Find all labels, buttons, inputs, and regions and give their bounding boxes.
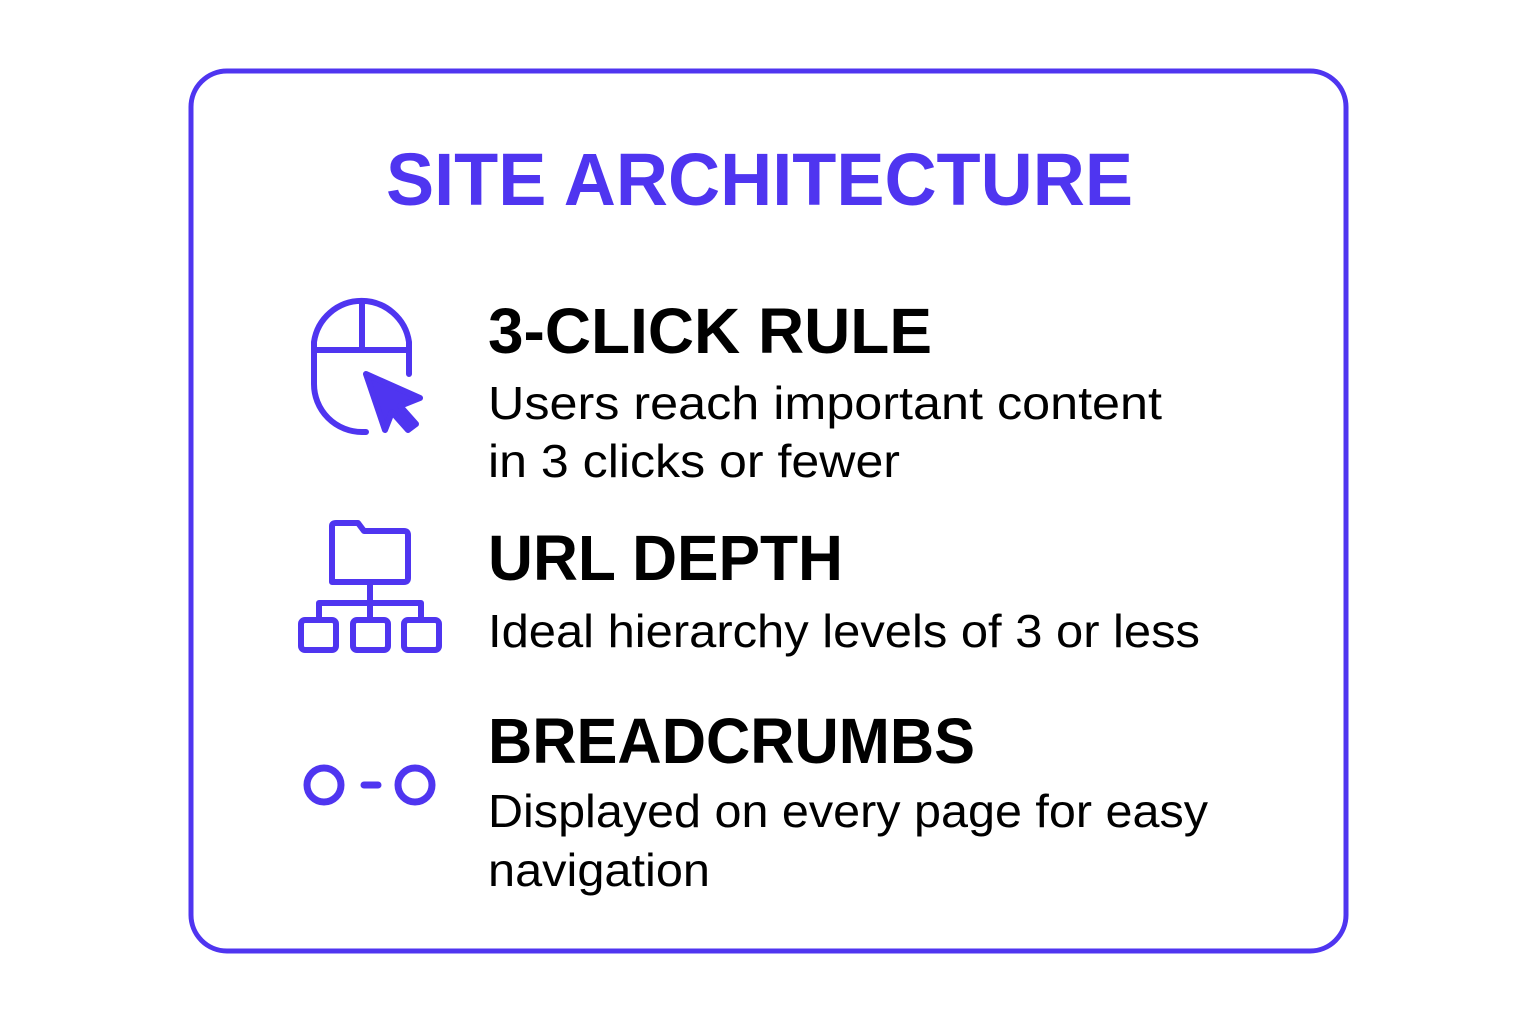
- icon: folder hierarchy: [301, 523, 439, 650]
- text: 3-click rule description: Users reach important content: [488, 377, 1162, 429]
- icon: breadcrumbs: [307, 768, 432, 802]
- text: breadcrumbs description: [488, 785, 1208, 896]
- panel: card border: [191, 71, 1346, 951]
- text: 3-click rule description: [488, 377, 1162, 487]
- heading: breadcrumbs: BREADCRUMBS: [488, 705, 975, 777]
- heading: url depth: URL DEPTH: [488, 522, 843, 594]
- text: url depth description: Ideal hierarchy levels of 3 or less: [488, 605, 1200, 657]
- text: breadcrumbs description: navigation: [488, 844, 710, 896]
- icon: mouse with cursor: [314, 298, 420, 432]
- heading: 3-click rule: 3-CLICK RULE: [488, 295, 932, 367]
- text: breadcrumbs description: Displayed on every page for easy: [488, 785, 1208, 837]
- title: SITE ARCHITECTURE: [386, 138, 1133, 221]
- text: 3-click rule description: in 3 clicks or fewer: [488, 435, 900, 487]
